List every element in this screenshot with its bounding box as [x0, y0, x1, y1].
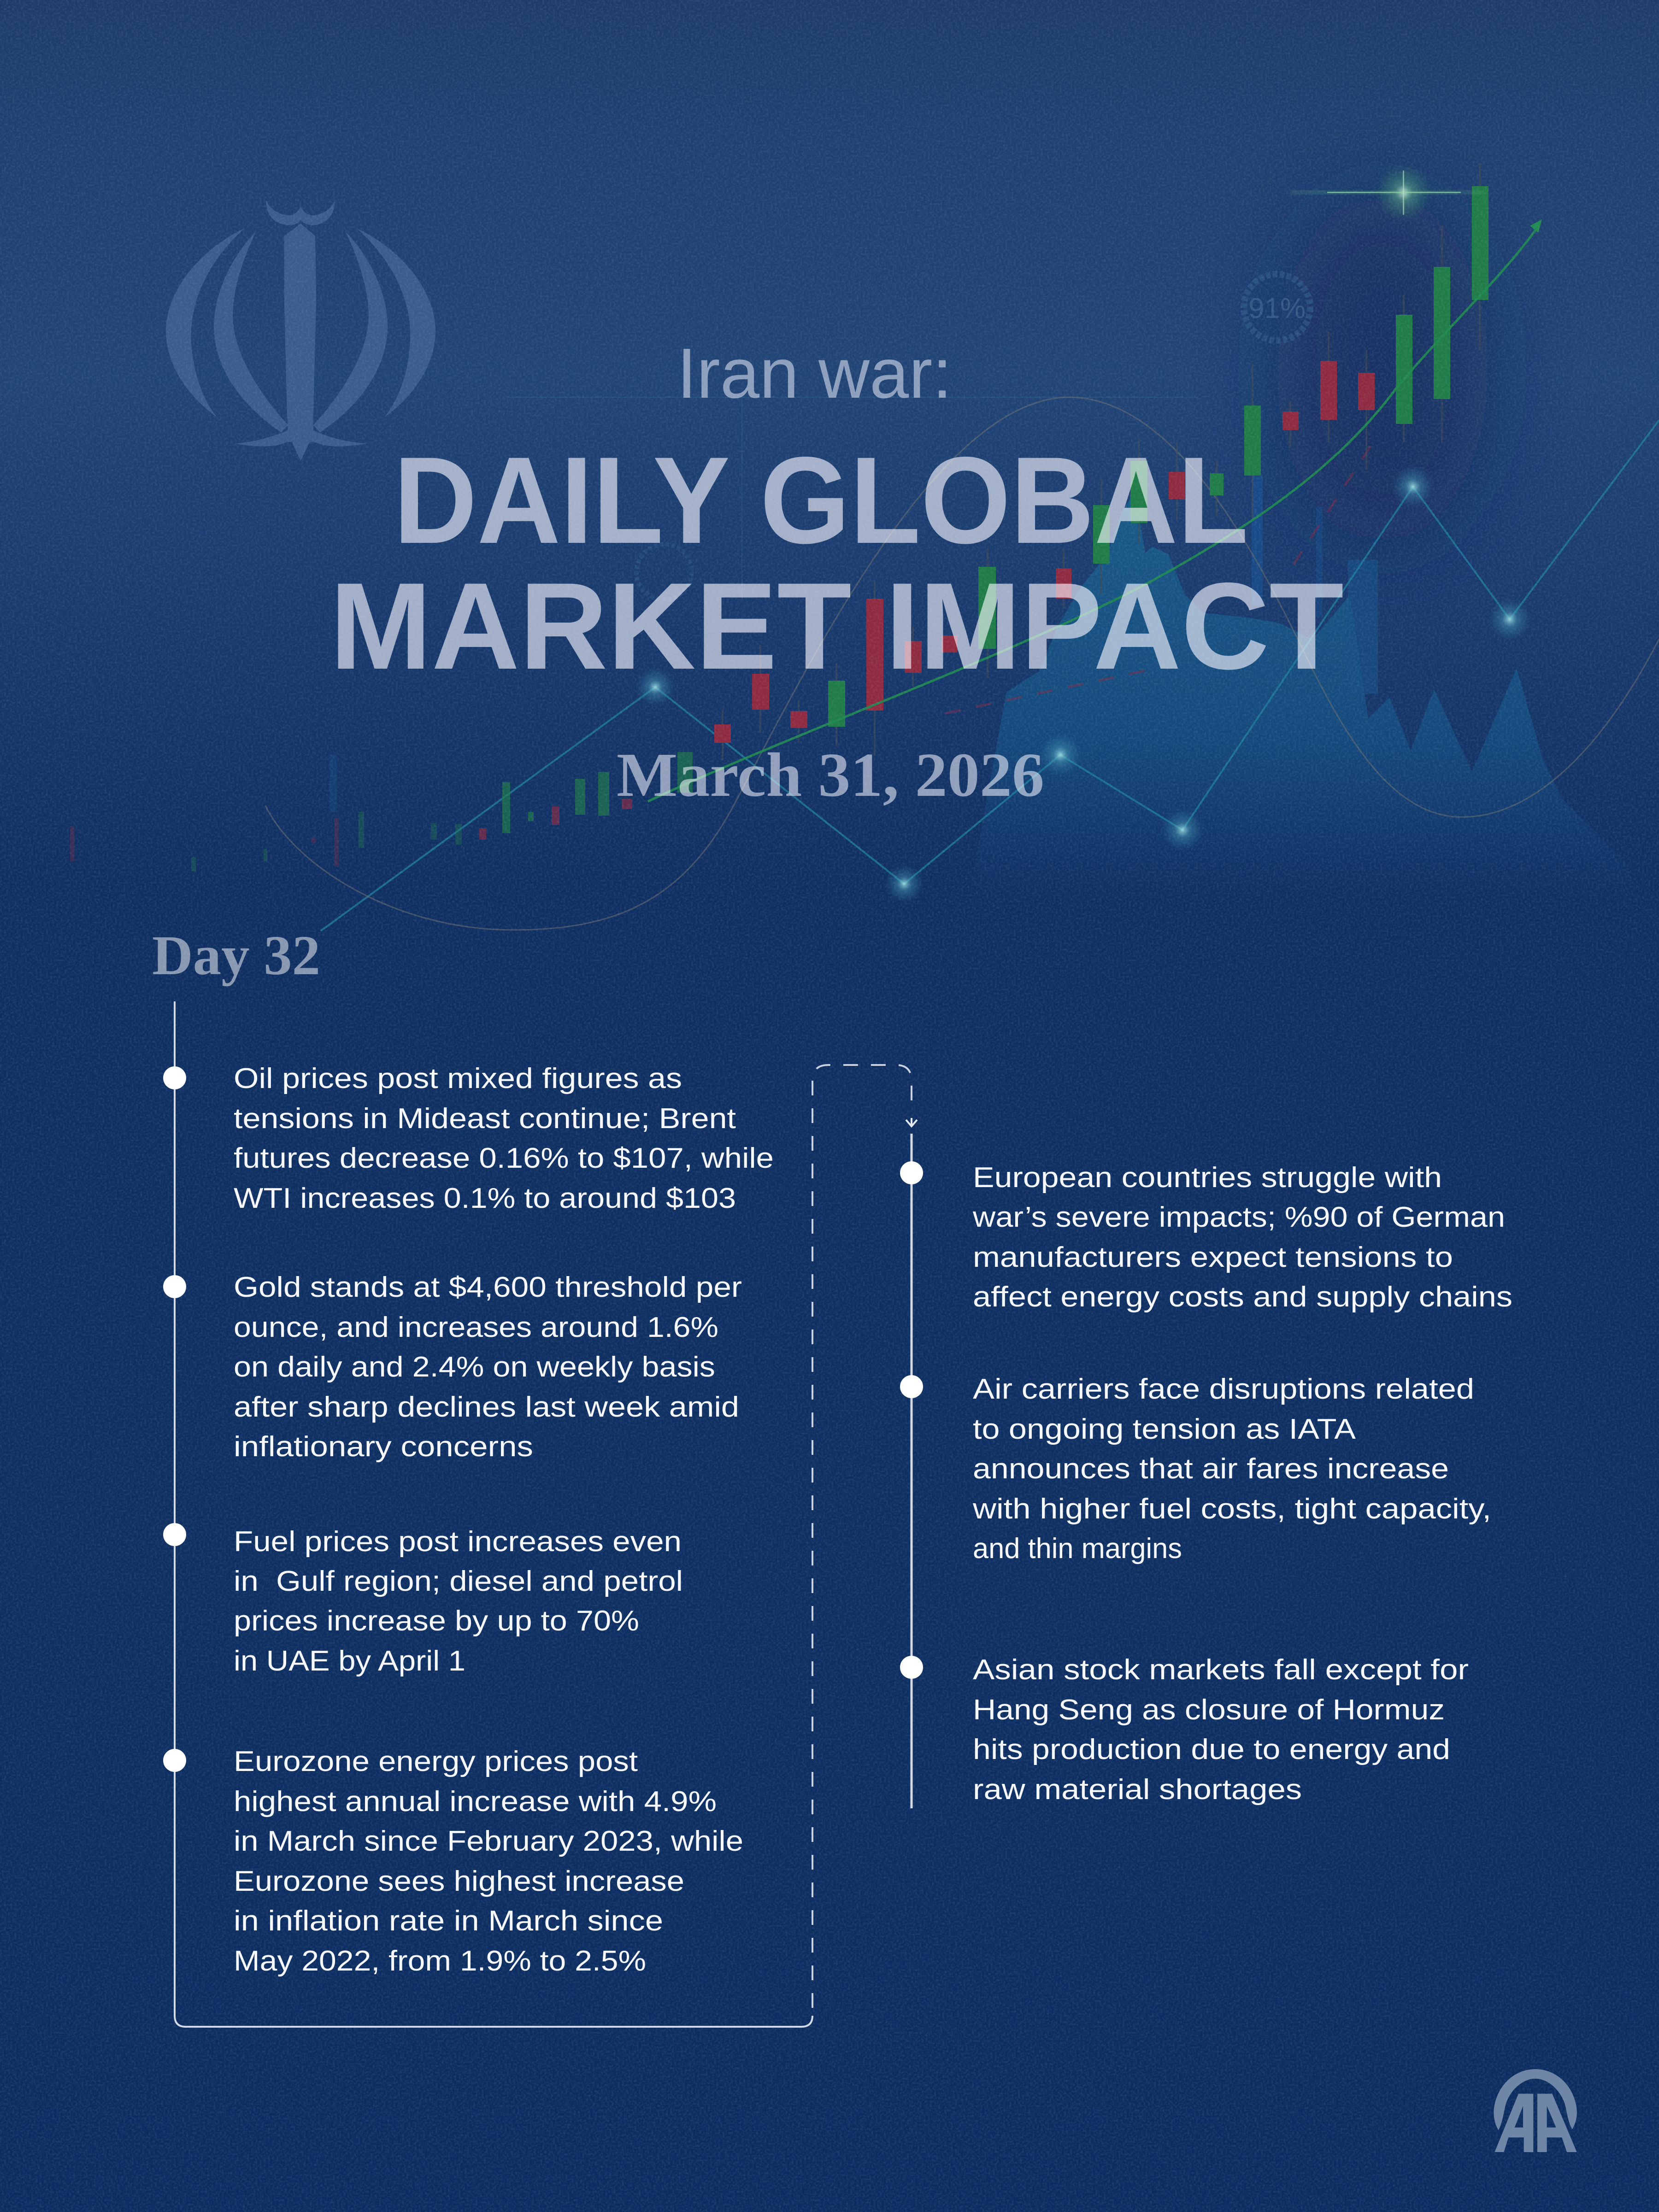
text block: gold	[234, 1271, 742, 1463]
text block: eurozone energy: in inflation rate in March since	[234, 1905, 663, 1937]
text block: european countries: European countries struggle with	[973, 1162, 1442, 1194]
text block: asian stock markets: hits production due to energy and	[973, 1734, 1450, 1765]
glowing nodes	[636, 465, 1531, 903]
text block: gold: inflationary concerns	[234, 1431, 533, 1463]
candlesticks	[70, 186, 1488, 871]
text block: eurozone energy: Eurozone energy prices post	[234, 1746, 638, 1777]
faint left candles	[502, 752, 693, 833]
text block: asian stock markets: Hang Seng as closure of Hormuz	[973, 1694, 1445, 1726]
text block: oil prices: Oil prices post mixed figures as	[234, 1063, 682, 1094]
text block: oil prices: tensions in Mideast continue; Brent	[234, 1103, 736, 1135]
text block: air carriers	[972, 1373, 1491, 1565]
text block: eurozone energy: May 2022, from 1.9% to 2.5%	[234, 1945, 646, 1977]
title: Daily Global Market Impact: DAILY GLOBAL	[394, 431, 1248, 569]
timeline connector: left line and bottom	[175, 1001, 812, 2027]
icon: Anadolu Agency logo	[1494, 2069, 1577, 2152]
network line	[321, 420, 1659, 931]
heading: Day 32: Day 32	[152, 924, 320, 987]
text block: eurozone energy	[234, 1746, 743, 1977]
timeline connector: dashed link	[812, 1065, 912, 2014]
small gauge	[636, 544, 692, 600]
green trend arrow	[648, 219, 1542, 801]
text block: european countries: war’s severe impacts; %90 of German	[972, 1201, 1505, 1233]
text block: air carriers: Air carriers face disruptions related	[973, 1373, 1474, 1405]
text block: asian stock markets: Asian stock markets fall except for	[973, 1654, 1469, 1686]
text block: eurozone energy: in March since February 2023, while	[234, 1825, 743, 1857]
text block: gold: ounce, and increases around 1.6%	[234, 1312, 718, 1343]
text block: gold: after sharp declines last week amid	[234, 1391, 739, 1423]
sine curve	[265, 397, 1659, 930]
text block: asian stock markets: raw material shortages	[973, 1774, 1302, 1806]
faint guide lines	[507, 397, 1198, 599]
percentage gauge	[1244, 274, 1310, 341]
dark silhouette behind chart	[1277, 194, 1488, 544]
timeline dots: left column	[163, 1066, 186, 1772]
text block: oil prices: WTI increases 0.1% to around $103	[234, 1182, 736, 1214]
arrow down	[906, 1118, 917, 1126]
text block: air carriers: and thin margins	[973, 1533, 1182, 1565]
text block: fuel prices: prices increase by up to 70%	[234, 1605, 639, 1637]
text block: asian stock markets	[973, 1654, 1469, 1806]
percentage gauge: 91%	[1248, 293, 1306, 324]
teal mountain chart	[329, 476, 1641, 903]
text block: gold: Gold stands at $4,600 threshold per	[234, 1271, 742, 1303]
text block: fuel prices: Fuel prices post increases even	[234, 1526, 682, 1558]
green star glow	[1290, 164, 1484, 221]
text block: air carriers: to ongoing tension as IATA	[973, 1413, 1356, 1445]
text block: fuel prices: in UAE by April 1	[234, 1645, 465, 1677]
timeline dots: right column	[900, 1161, 923, 1679]
market chart background	[70, 164, 1659, 931]
text block: oil prices: futures decrease 0.16% to $107, while	[234, 1142, 774, 1174]
text block: european countries: manufacturers expect tensions to	[973, 1241, 1453, 1273]
candlestick wicks	[723, 164, 1480, 760]
title: Iran war: Iran war:	[677, 334, 952, 413]
timeline connector: right line	[911, 1134, 912, 1808]
text block: eurozone energy: Eurozone sees highest increase	[234, 1865, 684, 1897]
text block: eurozone energy: highest annual increase with 4.9%	[234, 1786, 717, 1818]
text block: european countries	[972, 1162, 1512, 1313]
text block: fuel prices	[234, 1526, 683, 1677]
emblem of Iran watermark	[166, 200, 435, 461]
date: March 31, 2026	[617, 741, 1044, 810]
text block: air carriers: with higher fuel costs, tight capacity,	[972, 1493, 1491, 1525]
title: Daily Global Market Impact: MARKET IMPACT	[330, 557, 1344, 695]
text block: air carriers: announces that air fares increase	[973, 1453, 1449, 1485]
dashed red line	[945, 438, 1376, 713]
title: Daily Global Market Impact	[330, 431, 1344, 695]
text block: oil prices	[234, 1063, 774, 1214]
text block: european countries: affect energy costs and supply chains	[973, 1281, 1512, 1313]
text block: gold: on daily and 2.4% on weekly basis	[234, 1351, 715, 1383]
text block: fuel prices: in Gulf region; diesel and petrol	[234, 1565, 683, 1597]
